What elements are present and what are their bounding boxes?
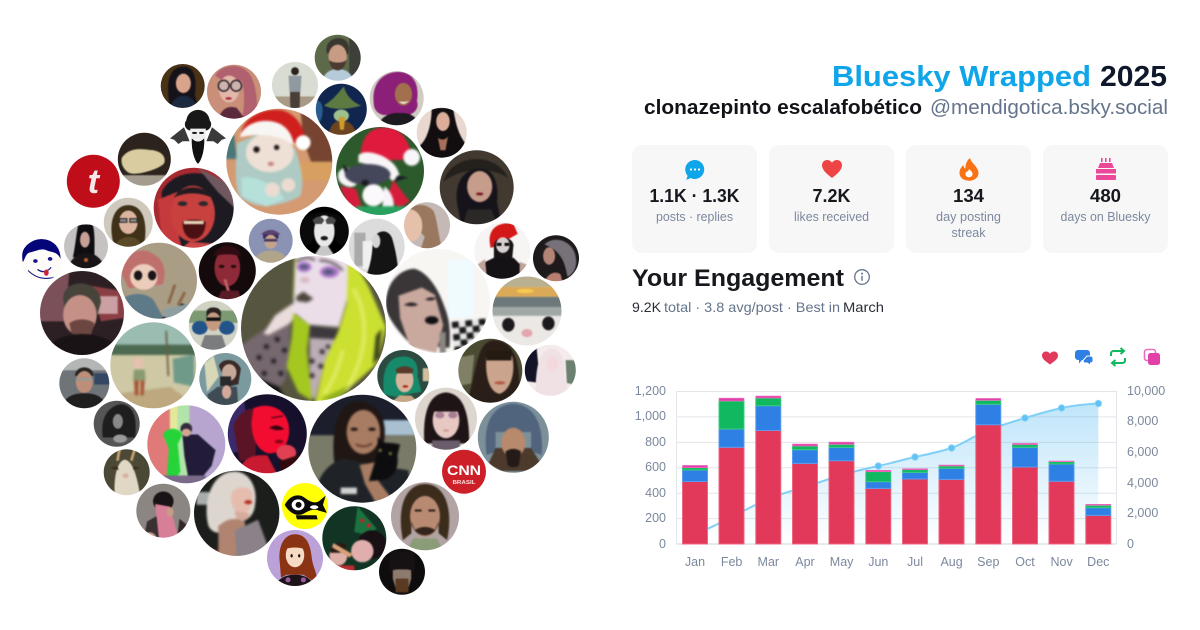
avatar: man with sunglasses and blue floats xyxy=(186,298,241,353)
avatar: black and white drag portrait xyxy=(300,206,349,256)
user name and handle: clonazepinto escalafobético xyxy=(644,97,922,119)
avatar: hamster in santa hat xyxy=(226,108,332,215)
avatar: yellow background eye fish logo xyxy=(279,480,331,532)
avatar: purple background cartoon woman xyxy=(264,527,326,589)
cumulative line xyxy=(695,404,1098,535)
avatar: woman grey-black hair xyxy=(533,235,579,282)
avatar: goth woman grey background xyxy=(64,224,108,268)
avatar: woman black hair low top xyxy=(416,108,467,158)
avatar: sunset and possum xyxy=(492,276,562,346)
left axis labels: 1,000 xyxy=(635,409,666,423)
engagement summary: total · 3.8 avg/post · Best in xyxy=(664,299,840,315)
icon: legend quotes xyxy=(1144,350,1160,365)
icon: legend replies xyxy=(1075,350,1093,366)
icon: flame xyxy=(960,158,978,181)
avatar: teal hair woman xyxy=(377,350,430,402)
month labels: Nov xyxy=(1050,555,1073,569)
stat card: days on Bluesky xyxy=(1043,145,1168,253)
avatar: pastry dish xyxy=(118,132,171,186)
stat card: day posting streak: 134 xyxy=(953,186,984,206)
cumulative points xyxy=(875,400,1102,469)
avatar: blonde woman red lips xyxy=(189,465,285,561)
avatar: bearded man xyxy=(314,34,361,81)
avatar: CNN Brasil logo: CNN xyxy=(447,463,481,478)
month labels: Jan xyxy=(685,555,705,569)
chart: monthly engagement stacked bars with cumulative line xyxy=(635,384,1165,569)
avatar: black and white curly hair xyxy=(91,398,142,449)
engagement summary: March xyxy=(843,299,884,315)
avatar: red t logo: t xyxy=(88,163,101,201)
avatar: man with moustache xyxy=(40,271,124,355)
avatar: man in fur hat xyxy=(478,402,549,473)
chart gridlines xyxy=(676,392,1116,544)
right axis labels: 10,000 xyxy=(1127,384,1165,398)
avatar: dark red face xyxy=(198,242,256,300)
cumulative area xyxy=(695,404,1098,544)
avatar: main woman with green hair xyxy=(241,256,386,401)
avatar: CNN Brasil logo: BRASIL xyxy=(452,480,476,486)
left axis labels: 600 xyxy=(645,460,666,474)
stat card: likes received xyxy=(769,145,894,253)
avatar: beach baby with umbrella xyxy=(105,317,201,413)
left axis labels: 400 xyxy=(645,486,666,500)
left axis labels: 800 xyxy=(645,435,666,449)
left axis labels: 200 xyxy=(645,511,666,525)
right axis labels xyxy=(1127,384,1165,551)
month labels: Oct xyxy=(1015,555,1035,569)
avatar: pale woman bangs and pink eyes xyxy=(415,388,477,450)
avatar: woman with pink scarf xyxy=(133,480,194,543)
avatar: white goat xyxy=(101,447,152,498)
avatar: pale white hair woman xyxy=(524,344,576,396)
avatar: woman in dark hat xyxy=(440,150,514,224)
left axis labels: 0 xyxy=(659,537,666,551)
avatar: corpse paint santa hat xyxy=(474,223,530,279)
month labels: Aug xyxy=(940,555,963,569)
avatar: CNN Brasil logo xyxy=(442,450,486,494)
avatar cluster xyxy=(18,32,582,597)
avatar: comic girl with drums xyxy=(121,242,197,319)
month labels xyxy=(685,555,1109,569)
avatar: woman with glasses and curly hair xyxy=(104,198,153,247)
month labels: Jul xyxy=(907,555,923,569)
right axis labels: 8,000 xyxy=(1127,414,1158,428)
avatar: blonde woman leaning xyxy=(404,202,450,248)
avatar: moomin character xyxy=(316,84,367,135)
user name and handle: @mendigotica.bsky.social xyxy=(930,97,1168,119)
bars: reposts xyxy=(682,398,1111,508)
avatar: bangs goth woman with checker xyxy=(386,249,490,353)
avatar: mirror selfie woman xyxy=(196,350,254,408)
right axis labels: 4,000 xyxy=(1127,476,1158,490)
engagement summary xyxy=(632,299,884,315)
icon: legend heart xyxy=(1042,352,1058,364)
icon: heart xyxy=(822,160,842,178)
stat card: posts and replies: 1.1K · 1.3K xyxy=(650,186,740,206)
right axis labels: 2,000 xyxy=(1127,506,1158,520)
engagement summary: 9.2K xyxy=(632,299,662,315)
avatar: blue haired cartoon xyxy=(22,239,61,279)
right axis labels: 6,000 xyxy=(1127,445,1158,459)
avatar: man in dark jacket xyxy=(56,355,112,411)
left axis labels: 1,200 xyxy=(635,384,666,398)
avatar: woman in red light xyxy=(223,389,312,478)
avatar: woman dark hair xyxy=(160,64,205,108)
left axis labels xyxy=(635,384,666,551)
stat card: likes received: likes received xyxy=(794,209,869,224)
avatar: man with shaggy hair xyxy=(391,482,459,550)
avatar: man holding black cat xyxy=(308,394,416,503)
icon: chat bubble xyxy=(685,160,704,179)
month labels: Jun xyxy=(868,555,888,569)
stat card: day posting streak: day posting xyxy=(936,209,1001,224)
avatar: woman with alien statue xyxy=(143,401,230,488)
stat card: days on Bluesky: days on Bluesky xyxy=(1060,209,1151,224)
stat card: likes received: 7.2K xyxy=(812,186,850,206)
bars: quotes xyxy=(682,396,1111,505)
stat card: posts and replies: posts · replies xyxy=(656,209,733,224)
icon: info xyxy=(855,270,869,284)
avatar: purple curly hair xyxy=(370,71,424,126)
icon: legend reposts xyxy=(1111,348,1125,366)
avatar: pink hair with glasses xyxy=(207,64,261,119)
avatar: bat winged bearded drawing xyxy=(170,110,226,164)
month labels: May xyxy=(830,555,854,569)
stat card: posts and replies xyxy=(632,145,757,253)
avatar: bat in santa costume xyxy=(336,127,424,215)
stat card: day posting streak: streak xyxy=(952,225,986,240)
month labels: Apr xyxy=(795,555,815,569)
icon: birthday cake xyxy=(1096,158,1116,180)
stat card: days on Bluesky: 480 xyxy=(1090,186,1121,206)
month labels: Sep xyxy=(977,555,999,569)
month labels: Feb xyxy=(721,555,742,569)
title: Bluesky Wrapped 2025: 2025 xyxy=(1100,61,1167,93)
month labels: Mar xyxy=(758,555,779,569)
avatar: black and white woman profile xyxy=(348,218,405,275)
bars: replies xyxy=(682,404,1111,515)
title: Bluesky Wrapped 2025: Bluesky Wrapped xyxy=(832,61,1091,93)
avatar: woman with fringe drinking xyxy=(379,548,425,595)
month labels: Dec xyxy=(1087,555,1109,569)
bars: likes xyxy=(682,425,1111,544)
avatar: man with purple hat xyxy=(248,218,293,263)
chart legend icons xyxy=(1042,348,1160,366)
user name and handle xyxy=(644,97,1168,119)
avatar: red t logo xyxy=(66,154,120,208)
stat card: day posting streak xyxy=(906,145,1031,253)
avatar: man standing before wall xyxy=(272,62,318,108)
avatar: woman dark bangs grey-green xyxy=(458,338,522,403)
heading: Your Engagement: Your Engagement xyxy=(632,265,844,292)
avatar: christmas couple xyxy=(322,506,386,570)
avatar: red haired woman laughing xyxy=(154,168,234,248)
right axis labels: 0 xyxy=(1127,537,1134,551)
